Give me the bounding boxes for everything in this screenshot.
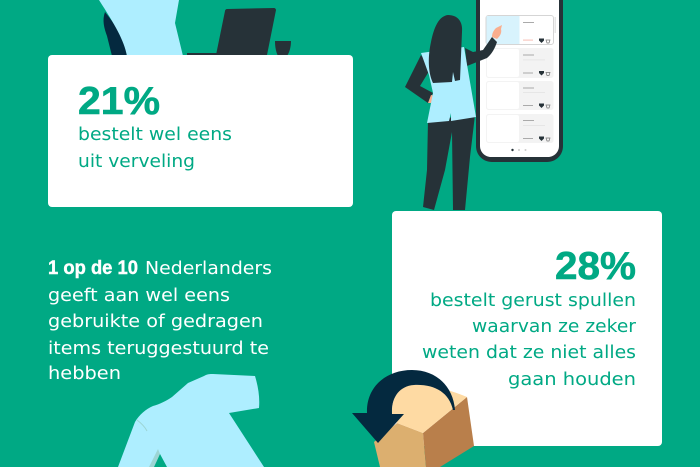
hand pointing xyxy=(492,25,502,39)
illustration: returned sweater xyxy=(118,374,264,467)
text: bestelt wel eens uit verveling xyxy=(78,124,232,172)
text: bestelt wel eens uit verveling: bestelt wel eens xyxy=(78,124,232,145)
stat: 21%: 21% xyxy=(78,80,160,123)
hair xyxy=(429,15,462,83)
blazer xyxy=(421,47,476,123)
left arm xyxy=(405,55,433,103)
text: 1 op de 10 Nederlanders: geeft aan wel eens xyxy=(48,285,230,306)
arrow xyxy=(352,370,455,443)
product card 4 xyxy=(486,114,554,143)
text: bestelt gerust spullen: bestelt gerust spullen xyxy=(430,290,636,311)
text: 1 op de 10 Nederlanders: items teruggestuurd te xyxy=(48,338,269,359)
text: bestelt wel eens uit verveling: uit verveling xyxy=(78,151,195,172)
illustration: woman pointing at phone xyxy=(405,15,502,210)
text: 1 op de 10 Nederlanders xyxy=(48,258,272,384)
panel: 21% card xyxy=(48,55,353,207)
text: bestelt gerust spullen xyxy=(422,290,637,390)
text: 1 op de 10 Nederlanders: gebruikte of gedragen xyxy=(48,311,263,332)
illustration: person with laptop at top left xyxy=(99,0,291,56)
text: 1 op de 10 Nederlanders: Nederlanders xyxy=(145,258,272,279)
text: bestelt gerust spullen: weten dat ze niet alles xyxy=(422,342,636,363)
product card 1 xyxy=(486,16,554,44)
product card 3 xyxy=(486,81,554,110)
stat: 28%: 28% xyxy=(555,245,636,288)
illustration: phone xyxy=(476,0,563,162)
text: 1 op de 10 Nederlanders: hebben xyxy=(48,363,121,384)
panel: 28% card xyxy=(392,211,662,446)
text: bestelt gerust spullen: gaan houden xyxy=(508,369,636,390)
product card 2 xyxy=(486,48,554,78)
text: 1 op de 10 Nederlanders: 1 op de 10 xyxy=(48,258,138,279)
legs xyxy=(423,115,475,210)
text: bestelt gerust spullen: waarvan ze zeker xyxy=(472,316,637,337)
right arm xyxy=(465,37,497,66)
illustration: return box with arrow xyxy=(352,370,474,467)
